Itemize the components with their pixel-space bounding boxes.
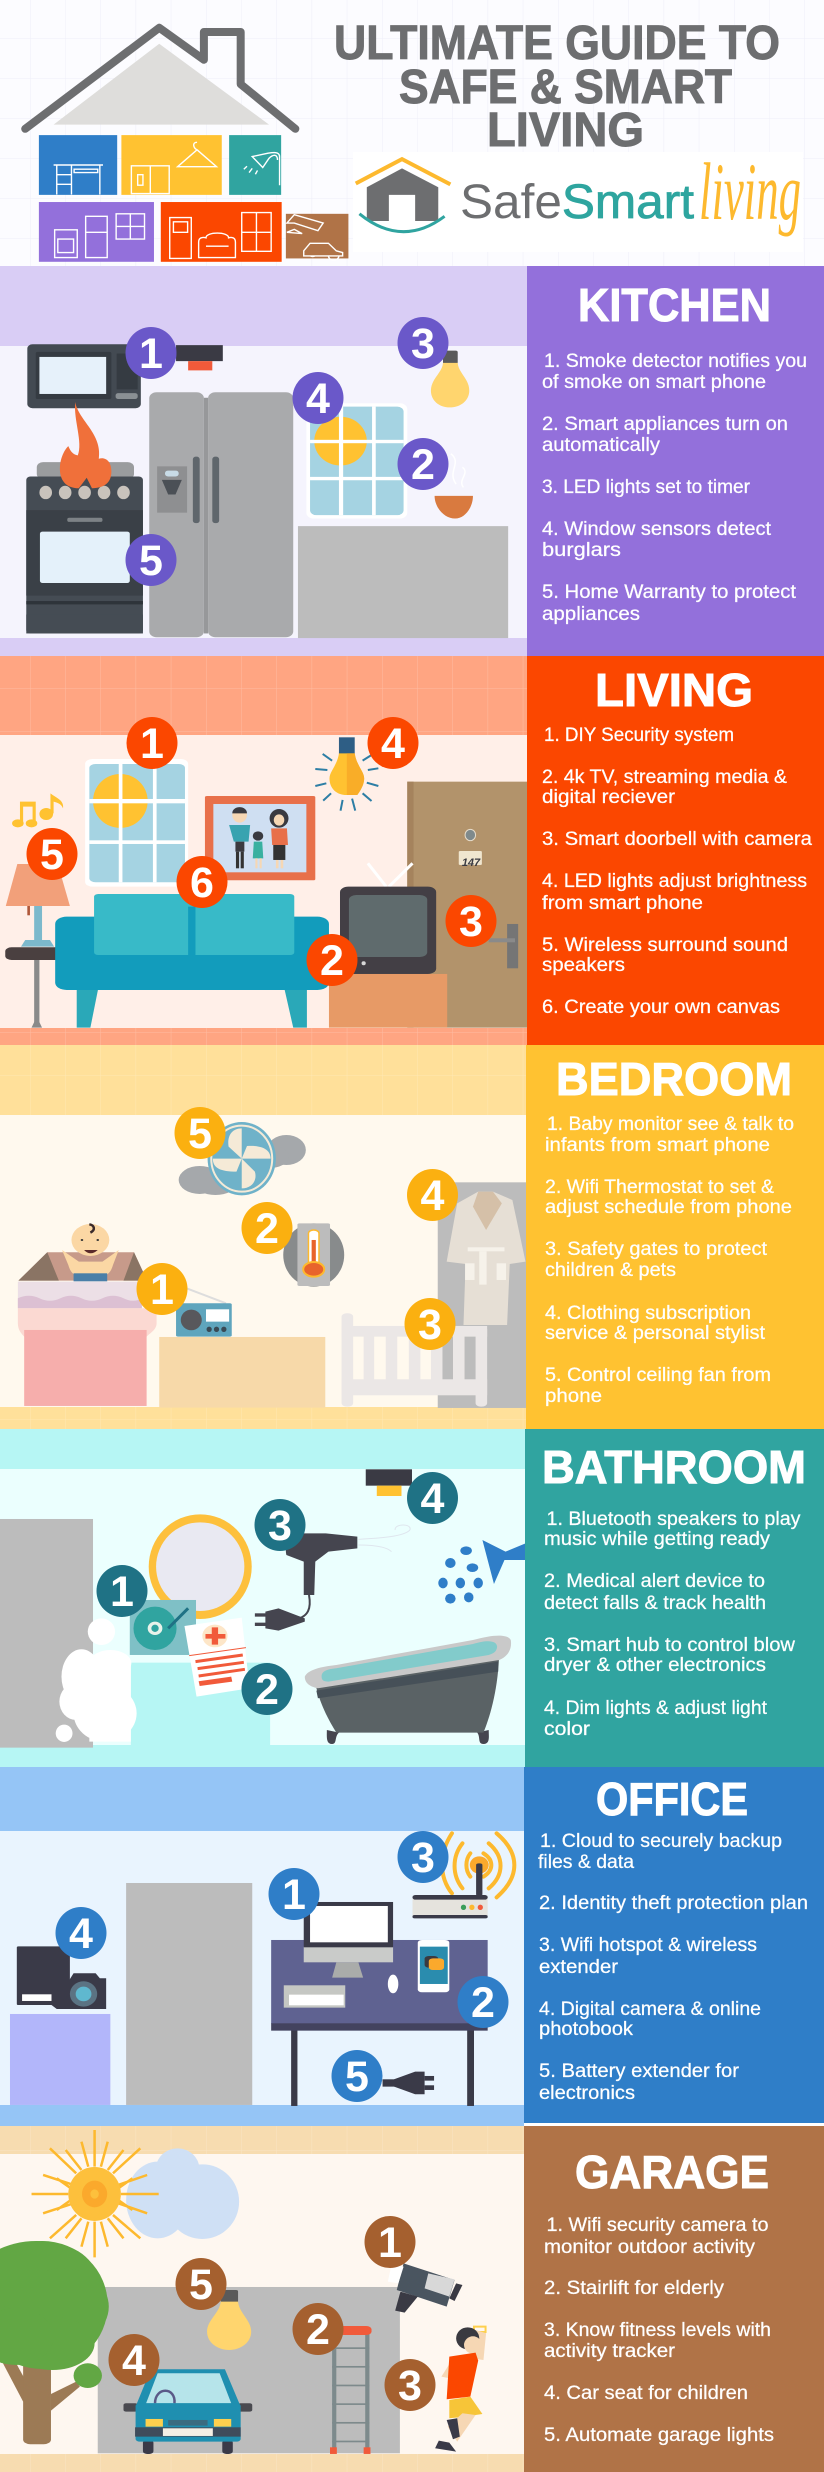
kitchen list: 3. LED lights set to timer [542, 477, 751, 498]
bedroom number badges: 5 [188, 1110, 212, 1158]
living number badges: 5 [40, 831, 64, 879]
light bulb [431, 351, 469, 407]
mouse [388, 1975, 398, 1993]
heading: garage: GARAGE [575, 2146, 769, 2198]
bathroom list: color [544, 1719, 591, 1740]
kitchen number badges: 2 [411, 441, 435, 489]
light bulb [207, 2290, 251, 2350]
baby in bassinet [18, 1224, 157, 1337]
bathroom list: music while getting ready [544, 1529, 771, 1550]
door number: 147 [462, 857, 481, 869]
office list: extender [539, 1957, 619, 1978]
bedroom number badges: 3 [418, 1301, 442, 1349]
garage list: 2. Stairlift for elderly [544, 2278, 725, 2299]
safety gate [342, 1313, 487, 1407]
tree [0, 2241, 109, 2444]
kitchen list: 2. Smart appliances turn on [542, 414, 788, 435]
living number badges [26, 717, 496, 986]
heading: kitchen: KITCHEN [578, 279, 771, 331]
heading: bathroom: BATHROOM [542, 1441, 806, 1493]
living list: 4. LED lights adjust brightness [542, 871, 807, 892]
bedroom number badges: 2 [255, 1205, 279, 1253]
kitchen list: 1. Smoke detector notifies you [544, 351, 807, 372]
office number badges [56, 1831, 508, 2102]
section: office [0, 1767, 824, 2126]
bedroom list [545, 1114, 794, 1407]
bedroom number badges [136, 1107, 458, 1350]
living list: 5. Wireless surround sound [542, 935, 788, 956]
ceiling bulb with rays [315, 737, 378, 811]
bathroom list [544, 1509, 801, 1740]
computer monitor [304, 1902, 393, 1978]
living list: 1. DIY Security system [544, 725, 734, 746]
office list: 2. Identity theft protection plan [539, 1893, 808, 1914]
door block [126, 1883, 252, 2105]
kitchen list: burglars [542, 540, 621, 561]
microwave [27, 344, 141, 408]
counter [298, 526, 508, 638]
smart light [366, 1469, 412, 1496]
garage list: 1. Wifi security camera to [546, 2215, 768, 2236]
office number badges: 2 [471, 1979, 495, 2027]
garage list: activity tracker [544, 2341, 676, 2362]
garage list: 3. Know fitness levels with [544, 2320, 771, 2341]
text panel: kitchen [527, 266, 824, 656]
kitchen illustration [26, 344, 508, 638]
living number badges: 1 [140, 720, 164, 768]
bedroom number badges: 4 [421, 1172, 445, 1220]
office number badges: 5 [345, 2053, 369, 2101]
kitchen list: appliances [542, 604, 640, 625]
foam bubbles [56, 1618, 137, 1742]
bedroom list: children & pets [545, 1260, 676, 1281]
kitchen list: automatically [542, 435, 661, 456]
garage number badges: 2 [306, 2306, 330, 2354]
living list: speakers [542, 955, 625, 976]
bedroom list: infants from smart phone [545, 1135, 770, 1156]
bathroom list: 2. Medical alert device to [544, 1571, 765, 1592]
kitchen number badges [126, 317, 448, 586]
section: living [0, 656, 824, 1045]
nightstand [159, 1337, 325, 1408]
photobook and camera [17, 1946, 106, 2009]
bathtub [305, 1636, 511, 1744]
closet [438, 1182, 527, 1408]
living list: from smart phone [542, 893, 703, 914]
coffee cup [435, 454, 473, 519]
kitchen list: 5. Home Warranty to protect [542, 582, 797, 603]
kitchen number badges: 4 [306, 375, 330, 423]
bathroom number badges [96, 1472, 458, 1715]
thermostat [283, 1223, 344, 1287]
garage list [544, 2215, 774, 2446]
shower head and drops [438, 1540, 526, 1604]
office list: files & data [538, 1852, 634, 1873]
sun [32, 2130, 159, 2257]
smartphone [418, 1940, 449, 1992]
vanity counter [131, 1663, 270, 1745]
bedroom list: 5. Control ceiling fan from [545, 1365, 771, 1386]
office list: electronics [539, 2083, 635, 2104]
text panel: bedroom [526, 1045, 824, 1429]
bedroom list: adjust schedule from phone [545, 1197, 792, 1218]
family portrait [205, 796, 315, 880]
shower door [0, 1519, 93, 1748]
TV stand [329, 974, 447, 1028]
door [407, 782, 527, 1028]
ladder / stairlift [330, 2326, 372, 2454]
title: LIVING [487, 104, 644, 157]
garage number badges: 5 [189, 2261, 213, 2309]
bathroom number badges: 2 [255, 1666, 279, 1714]
garage number badges [108, 2216, 436, 2411]
bathroom number badges: 4 [421, 1475, 445, 1523]
living list: 6. Create your own canvas [542, 997, 780, 1018]
section: bathroom [0, 1429, 824, 1767]
bassinet base [24, 1330, 147, 1406]
office list: photobook [539, 2019, 634, 2040]
office list: 3. Wifi hotspot & wireless [539, 1935, 757, 1956]
office list: 5. Battery extender for [539, 2061, 740, 2082]
shelf box [10, 2014, 110, 2105]
mirror [149, 1514, 252, 1619]
office number badges: 3 [411, 1834, 435, 1882]
bedroom list: 1. Baby monitor see & talk to [547, 1114, 794, 1135]
window [306, 403, 407, 519]
desk [271, 1940, 488, 2106]
title [334, 17, 780, 157]
car [123, 2369, 252, 2454]
bathroom number badges: 3 [268, 1502, 292, 1550]
text panel: garage [524, 2126, 824, 2472]
garage door [98, 2287, 400, 2453]
bedroom list: phone [545, 1386, 602, 1407]
TV [340, 863, 436, 974]
bathrobe [447, 1192, 526, 1325]
garage number badges: 3 [398, 2362, 422, 2410]
living number badges: 3 [459, 898, 483, 946]
bathroom number badges: 1 [110, 1568, 134, 1616]
kitchen number badges: 5 [139, 537, 163, 585]
header [0, 0, 824, 266]
living number badges: 6 [190, 859, 214, 907]
section: garage [0, 2126, 824, 2472]
battery plug [383, 2072, 434, 2094]
office number badges: 4 [69, 1910, 93, 1958]
air swirls [358, 1525, 410, 1552]
office list: 1. Cloud to securely backup [540, 1831, 782, 1852]
kitchen list: of smoke on smart phone [542, 372, 766, 393]
wifi router [413, 1833, 514, 1918]
garage list: 5. Automate garage lights [544, 2425, 774, 2446]
living number badges: 4 [381, 720, 405, 768]
bedroom list: 2. Wifi Thermostat to set & [545, 1177, 774, 1198]
bedroom number badges: 1 [150, 1266, 174, 1314]
bedroom list: 4. Clothing subscription [545, 1303, 751, 1324]
smoke detector [176, 345, 223, 370]
bathroom illustration [0, 1469, 526, 1748]
office list [538, 1831, 808, 2104]
living number badges: 2 [320, 937, 344, 985]
heading: living: LIVING [595, 664, 753, 716]
bathroom list: 4. Dim lights & adjust light [544, 1698, 768, 1719]
kitchen number badges: 3 [411, 320, 435, 368]
office illustration [10, 1833, 514, 2106]
garage illustration [0, 2130, 486, 2454]
garage number badges: 4 [122, 2337, 146, 2385]
title: ULTIMATE GUIDE TO [334, 17, 780, 70]
living list: 3. Smart doorbell with camera [542, 829, 812, 850]
keyboard [284, 1985, 345, 2008]
child with activity tracker [435, 2327, 486, 2452]
text panel: bathroom [525, 1429, 824, 1767]
kitchen list: 4. Window sensors detect [542, 519, 772, 540]
section: kitchen [0, 266, 824, 656]
text panel: living [527, 656, 824, 1045]
living list: digital reciever [542, 787, 676, 808]
heading: bedroom: BEDROOM [556, 1053, 792, 1105]
bathroom list: detect falls & track health [544, 1593, 766, 1614]
bathroom list: 1. Bluetooth speakers to play [546, 1509, 801, 1530]
fridge [149, 392, 293, 637]
music notes [12, 793, 63, 827]
sofa [55, 894, 329, 1028]
living illustration [5, 737, 527, 1028]
office number badges: 1 [282, 1871, 306, 1919]
living list: 2. 4k TV, streaming media & [542, 767, 787, 788]
bathroom list: dryer & other electronics [544, 1655, 766, 1676]
garage number badges: 1 [378, 2219, 402, 2267]
living list [542, 725, 812, 1018]
blow dryer [255, 1533, 357, 1631]
lamp and side table [5, 864, 70, 1028]
medical alert card [184, 1618, 250, 1697]
cloud [126, 2148, 239, 2239]
logo icon: house [356, 159, 450, 232]
section: bedroom [0, 1045, 824, 1429]
bedroom illustration [18, 1122, 527, 1408]
heading: office: OFFICE [596, 1773, 748, 1825]
house illustration [25, 28, 348, 262]
window [85, 759, 188, 887]
kitchen list [542, 351, 807, 625]
logo: SafeSmart living: SafeSmart [460, 176, 694, 229]
garage list: monitor outdoor activity [544, 2237, 756, 2258]
garage list: 4. Car seat for children [544, 2383, 748, 2404]
security camera [388, 2263, 462, 2313]
logo: SafeSmart living [353, 146, 803, 252]
radio [176, 1288, 232, 1337]
text panel: office [524, 1767, 824, 2123]
bedroom list: 3. Safety gates to protect [545, 1239, 768, 1260]
bathroom list: 3. Smart hub to control blow [544, 1635, 795, 1656]
bedroom list: service & personal stylist [545, 1323, 766, 1344]
ceiling fan with clouds [179, 1122, 306, 1195]
title: SAFE & SMART [399, 61, 732, 114]
kitchen number badges: 1 [139, 330, 163, 378]
stove with flame [26, 402, 143, 633]
bluetooth speaker [130, 1600, 196, 1655]
office list: 4. Digital camera & online [539, 1999, 761, 2020]
